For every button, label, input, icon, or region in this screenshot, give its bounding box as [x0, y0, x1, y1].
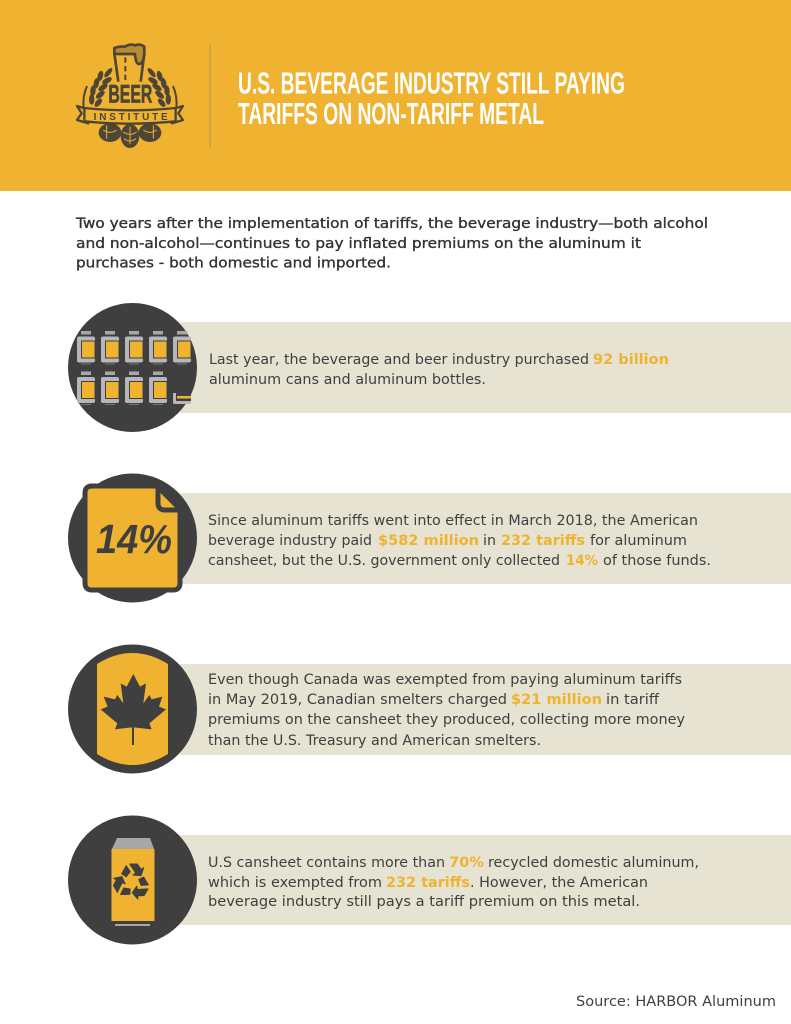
- intro text: purchases - both domestic and imported.: [76, 256, 391, 272]
- panel: recycled aluminum: [68, 816, 791, 944]
- text: Since aluminum tariffs went into effect in March 2018, the American: [208, 513, 698, 529]
- text: which is exempted from: [208, 875, 382, 891]
- logo: Beer Institute: INSTITUTE: [94, 112, 168, 123]
- panel: 14% collected: [68, 474, 791, 602]
- intro text: [75, 216, 708, 272]
- ribbon: [77, 106, 183, 123]
- band: [180, 664, 791, 755]
- logo: Beer Institute: [77, 45, 183, 148]
- icon: rows of cans: [68, 303, 197, 432]
- icon: can with recycling symbol: [68, 816, 197, 944]
- text: $21 million: [511, 692, 602, 708]
- text: [208, 513, 711, 569]
- text: Last year, the beverage and beer industry purchased: [209, 352, 589, 368]
- header banner: [0, 0, 791, 191]
- icon: document with 14%: [68, 474, 197, 602]
- title: TARIFFS ON NON-TARIFF METAL: [238, 96, 544, 131]
- text: in tariff: [606, 692, 660, 708]
- panel: 92 billion cans: [68, 303, 791, 432]
- source note: Source: HARBOR Aluminum: [576, 994, 776, 1010]
- text: $582 million: [378, 533, 479, 549]
- text: 70%: [449, 855, 484, 871]
- text: in: [483, 533, 496, 549]
- text: [208, 672, 685, 749]
- intro text: Two years after the implementation of tariffs, the beverage industry—both alcohol: [75, 216, 708, 232]
- text: beverage industry paid: [208, 533, 372, 549]
- hops: [99, 123, 161, 148]
- BEER wordmark: BEER: [108, 82, 152, 109]
- text: premiums on the cansheet they produced, collecting more money: [208, 712, 685, 728]
- text: for aluminum: [590, 533, 687, 549]
- text: [208, 855, 699, 910]
- glass: [114, 45, 144, 82]
- text: 92 billion: [593, 352, 669, 368]
- text: recycled domestic aluminum,: [488, 855, 699, 871]
- wheat right: [146, 67, 177, 108]
- text: 232 tariffs: [501, 533, 585, 549]
- text: beverage industry still pays a tariff premium on this metal.: [208, 894, 640, 910]
- text: cansheet, but the U.S. government only collected: [208, 553, 560, 569]
- wheat left: [83, 67, 114, 108]
- text: [209, 352, 669, 388]
- text: aluminum cans and aluminum bottles.: [209, 372, 486, 388]
- text: U.S cansheet contains more than: [208, 855, 445, 871]
- text: 232 tariffs: [386, 875, 470, 891]
- intro text: and non-alcohol—continues to pay inflated premiums on the aluminum it: [76, 236, 641, 252]
- band: [180, 835, 791, 925]
- text: than the U.S. Treasury and American smelters.: [208, 733, 541, 749]
- text: Even though Canada was exempted from paying aluminum tariffs: [208, 672, 682, 688]
- icon: document with 14%: 14%: [96, 516, 172, 562]
- text: in May 2019, Canadian smelters charged: [208, 692, 507, 708]
- text: of those funds.: [603, 553, 711, 569]
- band: [180, 493, 791, 584]
- title: [238, 66, 625, 131]
- band: [180, 322, 791, 413]
- text: . However, the American: [470, 875, 648, 891]
- icon: Canadian flag maple leaf: [68, 644, 197, 774]
- text: 14%: [566, 553, 598, 569]
- panel: Canadian smelters: [68, 644, 791, 774]
